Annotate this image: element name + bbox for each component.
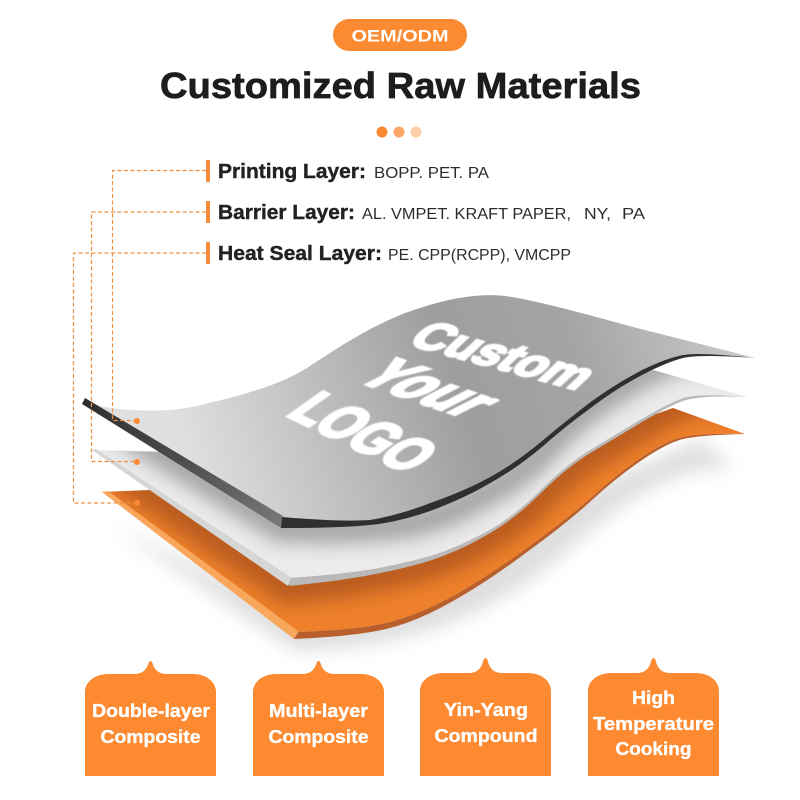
row: printing layer: BOPP. PET. PA (374, 165, 489, 182)
ground shadow (112, 440, 735, 650)
card: yin-yang compound (420, 658, 551, 776)
decorative dots (376, 126, 422, 138)
leader endpoints (134, 418, 140, 506)
orange layer (92, 396, 748, 639)
logo text on sheet (274, 314, 609, 482)
card: multi-layer composite: Multi-layer (269, 701, 368, 721)
row: printing layer: Printing Layer: (218, 161, 366, 183)
badge: OEM/ODM (333, 19, 467, 51)
logo text on sheet: LOGO (274, 382, 454, 482)
logo text on sheet: Your (339, 351, 521, 425)
row: heat seal layer (206, 242, 571, 265)
leader line: barrier layer (92, 212, 206, 462)
title: Customized Raw Materials (160, 65, 641, 106)
row: heat seal layer: Heat Seal Layer: (218, 243, 382, 265)
row: barrier layer (206, 201, 645, 224)
row: barrier layer: NY, (584, 206, 611, 223)
row: barrier layer: Barrier Layer: (218, 202, 355, 224)
card: high temperature cooking (588, 658, 719, 776)
row: printing layer (206, 160, 489, 183)
black front edge (281, 354, 755, 528)
row: barrier layer: PA (622, 206, 645, 223)
leader line: heat seal layer (74, 253, 206, 503)
row: barrier layer: AL. VMPET. KRAFT PAPER, (362, 206, 571, 223)
card: high temperature cooking: Temperature (593, 714, 714, 734)
row: heat seal layer: PE. CPP(RCPP), VMCPP (388, 247, 571, 264)
leader line: printing layer (112, 170, 206, 420)
layered material illustration (82, 295, 755, 650)
card: double-layer composite (85, 661, 216, 776)
card: high temperature cooking: High (632, 688, 675, 708)
card: double-layer composite: Composite (100, 727, 200, 747)
white layer (82, 356, 755, 586)
card: high temperature cooking: Cooking (616, 739, 692, 759)
logo text on sheet: Custom (398, 314, 609, 398)
card: multi-layer composite: Composite (268, 727, 368, 747)
card: double-layer composite: Double-layer (92, 701, 210, 721)
card: yin-yang compound: Compound (434, 726, 538, 746)
card: multi-layer composite (253, 661, 384, 776)
dark side edge (82, 398, 283, 528)
card: yin-yang compound: Yin-Yang (444, 700, 528, 720)
top grey printing layer (82, 295, 755, 528)
badge: OEM/ODM: OEM/ODM (352, 26, 448, 46)
